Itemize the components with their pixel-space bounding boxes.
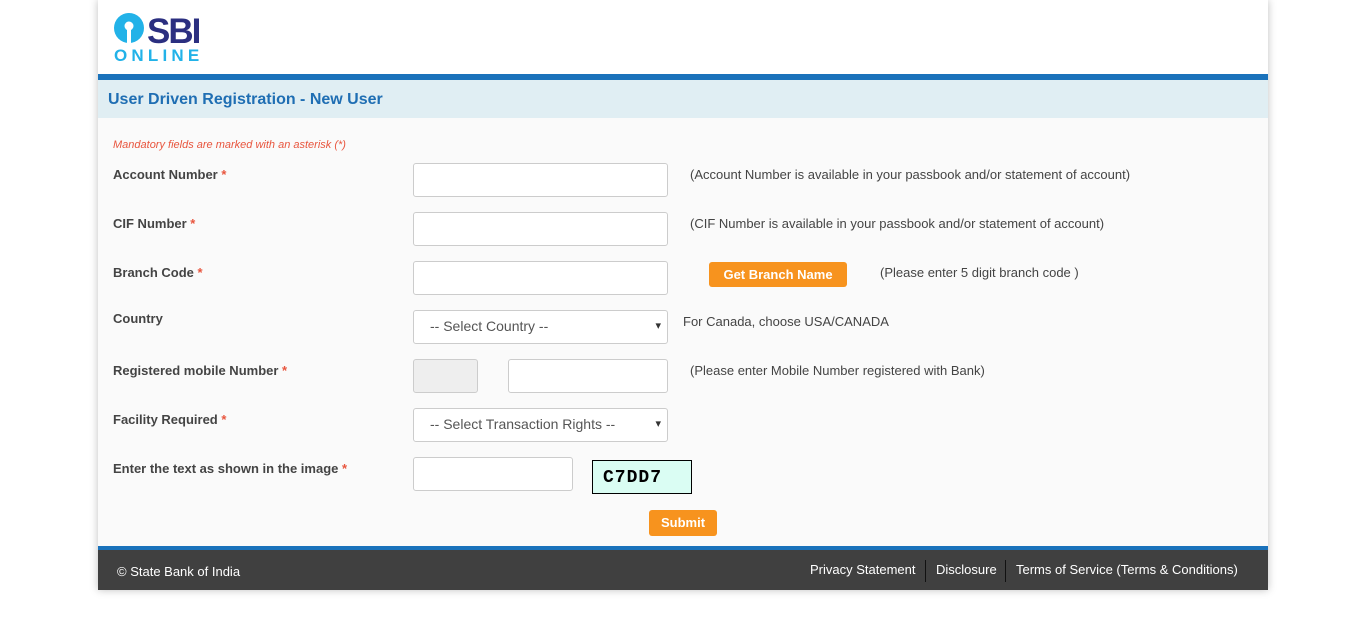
header <box>98 0 1268 74</box>
form <box>113 163 1130 536</box>
footer <box>98 550 1268 590</box>
form: (Please enter 5 digit branch code ) <box>880 265 1079 280</box>
title band: User Driven Registration - New User <box>108 91 383 108</box>
form: Country <box>113 311 163 326</box>
form: (CIF Number is available in your passbook and/or statement of account) <box>690 216 1104 231</box>
captcha <box>592 460 692 494</box>
footer: Privacy Statement <box>810 562 916 577</box>
form: -- Select Transaction Rights -- <box>430 416 615 432</box>
form: Branch Code * <box>113 265 203 280</box>
form: (Please enter Mobile Number registered with Bank) <box>690 363 985 378</box>
form: Account Number * <box>113 167 226 182</box>
form: Registered mobile Number * <box>113 363 287 378</box>
mandatory note: Mandatory fields are marked with an asterisk (*) <box>113 139 346 151</box>
captcha: C7DD7 <box>603 468 662 488</box>
form: Get Branch Name <box>723 267 833 282</box>
form: (Account Number is available in your passbook and/or statement of account) <box>690 167 1130 182</box>
footer: © State Bank of India <box>117 564 240 579</box>
form: -- Select Country -- <box>430 318 548 334</box>
form: CIF Number * <box>113 216 195 231</box>
form: Facility Required * <box>113 412 226 427</box>
title band <box>98 80 1268 118</box>
form: Enter the text as shown in the image * <box>113 461 347 476</box>
footer: Terms of Service (Terms & Conditions) <box>1016 562 1238 577</box>
logo <box>114 12 203 62</box>
form: For Canada, choose USA/CANADA <box>683 314 889 329</box>
submit button: Submit <box>661 515 705 530</box>
logo: SBI <box>147 12 200 51</box>
footer: Disclosure <box>936 562 997 577</box>
submit button <box>649 510 717 536</box>
